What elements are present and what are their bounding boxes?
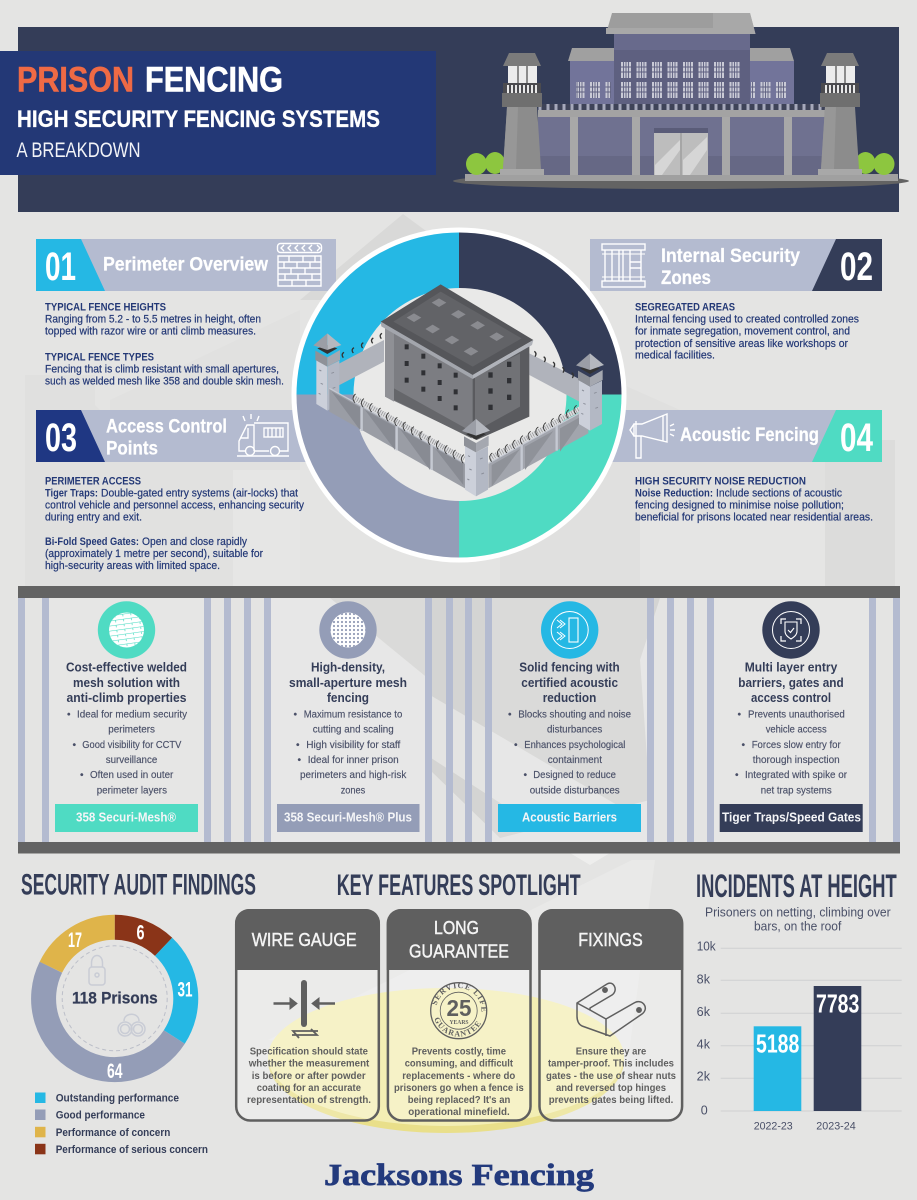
panel 03 text: Open and close rapidly bbox=[142, 536, 248, 548]
heading 01: Perimeter Overview bbox=[103, 254, 268, 276]
bullet list: outside disturbances bbox=[530, 786, 620, 797]
heading 04: Acoustic Fencing bbox=[680, 425, 819, 446]
product button: Tiger Traps/Speed Gates bbox=[722, 811, 861, 825]
number 01 tab bbox=[36, 239, 105, 291]
donut chart bbox=[44, 922, 193, 1083]
bullet list: Designed to reduce bbox=[533, 770, 616, 781]
bullet list: Forces slow entry for bbox=[752, 740, 841, 751]
card title: WIRE GAUGE bbox=[252, 929, 357, 950]
y axis labels: 4k bbox=[697, 1037, 711, 1051]
product button: 358 Securi-Mesh® Plus bbox=[284, 811, 412, 825]
bullet list: cutting and scaling bbox=[313, 725, 394, 736]
card text: and reversed top hinges bbox=[556, 1083, 666, 1094]
card text bbox=[546, 1046, 676, 1106]
title: FENCING bbox=[145, 60, 283, 100]
illustration: isometric prison bbox=[313, 284, 604, 496]
icon: acoustic barrier bbox=[541, 601, 598, 659]
panel 03 text: PERIMETER ACCESS bbox=[45, 476, 141, 488]
number 04: 04 bbox=[840, 416, 874, 460]
panel 01 text: TYPICAL FENCE HEIGHTS bbox=[45, 302, 166, 314]
central ring bbox=[292, 228, 626, 562]
heading 02: Zones bbox=[661, 268, 711, 289]
bar 2022-23 bbox=[754, 1026, 801, 1111]
icon: shield bbox=[762, 601, 820, 659]
card title: FIXINGS bbox=[578, 929, 643, 950]
bullet list: • bbox=[514, 740, 518, 751]
heading bbox=[519, 660, 620, 705]
panel 02 text: protection of sensitive areas like workshops or bbox=[635, 338, 848, 350]
card text: replacements - where do bbox=[402, 1071, 515, 1082]
heading 02 bbox=[661, 246, 800, 289]
bullet list: surveillance bbox=[106, 755, 158, 766]
card text: Ensure they are bbox=[576, 1046, 647, 1057]
icon: wire gauge bbox=[274, 983, 335, 1038]
title: PRISON bbox=[17, 60, 134, 100]
bullet list: thorough inspection bbox=[753, 755, 840, 766]
segment values: 6 bbox=[136, 922, 144, 944]
heading bbox=[289, 660, 407, 705]
panel 02 text: SEGREGATED AREAS bbox=[635, 302, 735, 314]
card text: operational minefield. bbox=[408, 1107, 510, 1118]
product button bbox=[277, 804, 420, 832]
bullet list: • bbox=[294, 709, 298, 720]
heading: certified acoustic bbox=[521, 675, 618, 690]
panel 02 band bbox=[590, 239, 882, 291]
card text: gates - the use of shear nuts bbox=[546, 1071, 676, 1082]
y axis labels: 10k bbox=[697, 940, 716, 954]
title bbox=[17, 60, 283, 100]
card text: being replaced? It's an bbox=[408, 1095, 510, 1106]
panel 03 text: Double-gated entry systems (air-locks) that bbox=[101, 488, 298, 500]
bullet list: perimeter layers bbox=[97, 786, 167, 797]
bullet list bbox=[735, 709, 848, 797]
x axis labels bbox=[754, 1120, 856, 1132]
product button: Acoustic Barriers bbox=[522, 811, 617, 825]
panel 02 text: medical facilities. bbox=[635, 350, 715, 362]
bullet list: • bbox=[72, 740, 76, 751]
legend bbox=[35, 1092, 208, 1156]
icon: padlock bbox=[89, 956, 105, 985]
y axis labels bbox=[697, 940, 716, 1118]
legend: Performance of concern bbox=[56, 1127, 171, 1139]
heading: High-density, bbox=[311, 660, 385, 674]
bullet list: zones bbox=[341, 786, 365, 797]
panel 04 text: Noise Reduction: bbox=[635, 488, 713, 500]
icon: internal gate bbox=[602, 244, 645, 287]
bullet list: vehicle access bbox=[766, 725, 827, 736]
number 02: 02 bbox=[840, 245, 873, 289]
chart subtitle bbox=[705, 905, 891, 933]
tagline: A BREAKDOWN bbox=[16, 138, 140, 162]
heading: reduction bbox=[543, 690, 596, 705]
icon: bracket bbox=[577, 983, 645, 1036]
panel 03 text bbox=[45, 476, 305, 572]
heading: key features spotlight: KEY FEATURES SPOTLIGHT bbox=[337, 869, 581, 902]
panel 04 text: Include sections of acoustic bbox=[716, 488, 843, 500]
number 03: 03 bbox=[45, 416, 77, 460]
panel 01 text bbox=[45, 302, 284, 388]
title panel bbox=[0, 51, 436, 175]
product column: Tiger Traps / Speed Gates bbox=[720, 601, 863, 832]
bullet list: perimeters and high-risk bbox=[300, 770, 407, 781]
panel 03 text: control vehicle and personnel access, enhancing security bbox=[45, 500, 305, 512]
bullet list: • bbox=[738, 709, 742, 720]
legend: Outstanding performance bbox=[56, 1093, 179, 1105]
panel 01 text: Ranging from 5.2 - to 5.5 metres in height, often bbox=[45, 314, 261, 326]
panel 01 text: topped with razor wire or anti climb measures. bbox=[45, 326, 256, 338]
icon: prison van bbox=[237, 414, 289, 456]
segment values: 64 bbox=[107, 1060, 123, 1083]
card text: is before or after powder bbox=[252, 1071, 366, 1082]
icon: 25 year badge: 25 bbox=[446, 995, 472, 1021]
bullet list: High visibility for staff bbox=[306, 740, 400, 751]
product column: Acoustic Barriers bbox=[498, 601, 641, 832]
panel 01 band bbox=[36, 239, 336, 291]
card text: prevents gates being lifted. bbox=[549, 1095, 673, 1106]
panel 01 text: TYPICAL FENCE TYPES bbox=[45, 352, 154, 364]
heading: anti-climb properties bbox=[66, 690, 186, 705]
number 04 tab bbox=[812, 410, 882, 462]
heading: small-aperture mesh bbox=[289, 675, 407, 690]
bullet list: Often used in outer bbox=[90, 770, 174, 781]
fence section frame bbox=[18, 586, 900, 854]
y axis labels: 6k bbox=[697, 1005, 711, 1019]
heading: security audit findings: SECURITY AUDIT FINDINGS bbox=[21, 868, 256, 902]
panel 01 text: such as welded mesh like 358 and double skin mesh. bbox=[45, 376, 284, 388]
panel 03 text: Bi-Fold Speed Gates: bbox=[45, 536, 139, 548]
panel 02 text: Internal fencing used to created controlled zones bbox=[635, 314, 860, 326]
icon: dense mesh bbox=[319, 601, 377, 659]
heading 03: Access Control bbox=[106, 416, 227, 438]
heading: Multi layer entry bbox=[745, 660, 838, 674]
heading: fencing bbox=[327, 690, 369, 705]
card title bbox=[409, 917, 509, 961]
bar 2023-24 bbox=[814, 986, 861, 1111]
x axis labels: 2022-23 bbox=[754, 1120, 793, 1132]
icon: megaphone bbox=[630, 414, 675, 458]
bullet list bbox=[508, 709, 631, 797]
number 01: 01 bbox=[45, 245, 76, 289]
subtitle: HIGH SECURITY FENCING SYSTEMS bbox=[17, 106, 380, 133]
y axis labels: 0 bbox=[701, 1104, 708, 1118]
panel 03 band bbox=[36, 410, 336, 462]
y axis labels: 2k bbox=[697, 1070, 711, 1084]
icon: handcuffs bbox=[118, 1014, 145, 1036]
card text bbox=[247, 1046, 371, 1106]
chart subtitle: Prisoners on netting, climbing over bbox=[705, 905, 891, 920]
card: long guarantee bbox=[386, 909, 532, 1122]
bullet list: Enhances psychological bbox=[524, 740, 625, 751]
icon: 25 year badge: YEARS bbox=[450, 1019, 469, 1026]
logo: Jacksons Fencing: Jacksons Fencing bbox=[324, 1157, 595, 1192]
panel 01 text: Fencing that is climb resistant with small apertures, bbox=[45, 364, 279, 376]
heading: barriers, gates and bbox=[738, 675, 844, 690]
panel 04 text: fencing designed to minimise noise pollution; bbox=[635, 500, 844, 512]
heading: Solid fencing with bbox=[519, 660, 620, 674]
card text: coating for an accurate bbox=[257, 1083, 361, 1094]
heading 03: Points bbox=[106, 438, 158, 460]
number 02 tab bbox=[812, 239, 882, 291]
bullet list: perimeters bbox=[108, 725, 155, 736]
heading bbox=[738, 660, 844, 705]
panel 04 text: beneficial for prisons located near residential areas. bbox=[635, 512, 873, 524]
icon: 25 year badge: GUARANTEE bbox=[435, 1018, 481, 1036]
heading: mesh solution with bbox=[73, 675, 180, 690]
bullet list: Blocks shouting and noise bbox=[518, 709, 631, 720]
product button bbox=[55, 804, 198, 832]
bullet list: • bbox=[508, 709, 512, 720]
panel 02 text bbox=[635, 302, 860, 362]
heading 03 bbox=[106, 416, 227, 460]
card text: Prevents costly, time bbox=[412, 1046, 506, 1057]
chart subtitle: bars, on the roof bbox=[754, 918, 842, 933]
card: fixings bbox=[538, 909, 683, 1120]
bullet list: • bbox=[67, 709, 71, 720]
centre label: 118 Prisons bbox=[72, 988, 158, 1008]
bullet list: • bbox=[80, 770, 84, 781]
segment values: 31 bbox=[178, 978, 193, 1002]
card text: representation of strength. bbox=[247, 1095, 371, 1106]
icon: 25 year badge: SERVICE LIFE bbox=[432, 983, 486, 1012]
icon: welded mesh bbox=[98, 601, 155, 659]
y axis labels: 8k bbox=[697, 972, 711, 986]
legend: Good performance bbox=[56, 1110, 145, 1122]
segment values: 17 bbox=[68, 929, 82, 952]
illustration: prison building bbox=[453, 13, 909, 189]
icon: 25 year badge bbox=[430, 982, 488, 1040]
bullet list: disturbances bbox=[547, 725, 602, 736]
card: wire gauge bbox=[235, 909, 380, 1120]
panel 02 text: for inmate segregation, movement control, and bbox=[635, 326, 850, 338]
card text bbox=[394, 1046, 524, 1118]
panel 03 text: Tiger Traps: bbox=[45, 488, 98, 500]
product button bbox=[720, 804, 863, 832]
spotlight beam and pool bbox=[268, 860, 655, 1133]
panel 03 text: (approximately 1 metre per second), suitable for bbox=[45, 548, 263, 560]
bullet list: • bbox=[735, 770, 739, 781]
bullet list: containment bbox=[548, 755, 602, 766]
card text: tamper-proof. This includes bbox=[548, 1058, 674, 1070]
panel 03 text: during entry and exit. bbox=[45, 512, 142, 524]
header band bbox=[18, 27, 899, 212]
icon: razor wall bbox=[278, 244, 322, 286]
panel 04 text: HIGH SECURITY NOISE REDUCTION bbox=[635, 476, 806, 488]
bullet list: Integrated with spike or bbox=[745, 770, 848, 781]
bar 2023-24: 7783 bbox=[816, 989, 859, 1019]
segment values bbox=[68, 922, 193, 1083]
bullet list: net trap systems bbox=[761, 786, 832, 797]
bullet list: • bbox=[524, 770, 528, 781]
number 03 tab bbox=[36, 410, 105, 462]
bullet list: Ideal for inner prison bbox=[308, 755, 399, 766]
panel 03 text: high-security areas with limited space. bbox=[45, 560, 220, 572]
product button: 358 Securi-Mesh® bbox=[76, 811, 177, 825]
card text: consuming, and difficult bbox=[405, 1058, 514, 1070]
bullet list: • bbox=[296, 740, 300, 751]
card title: GUARANTEE bbox=[409, 940, 509, 961]
bullet list bbox=[294, 709, 407, 797]
faint prison watermark bbox=[25, 214, 895, 865]
panel 04 band bbox=[590, 410, 882, 462]
product button bbox=[498, 804, 641, 832]
bullet list: • bbox=[742, 740, 746, 751]
heading 02: Internal Security bbox=[661, 246, 800, 267]
heading: access control bbox=[751, 690, 831, 705]
legend: Performance of serious concern bbox=[56, 1144, 208, 1156]
heading bbox=[66, 660, 187, 705]
bullet list: Maximum resistance to bbox=[304, 709, 403, 720]
bullet list: Prevents unauthorised bbox=[748, 709, 845, 720]
card text: prisoners go when a fence is bbox=[394, 1083, 524, 1094]
card text: whether the measurement bbox=[248, 1058, 370, 1070]
bullet list: • bbox=[298, 755, 302, 766]
product column: 358 Securi-Mesh Plus bbox=[277, 601, 420, 832]
heading: Cost-effective welded bbox=[66, 660, 187, 674]
bullet list: Ideal for medium security bbox=[77, 709, 188, 720]
x axis labels: 2023-24 bbox=[816, 1120, 856, 1132]
bullet list bbox=[67, 709, 188, 797]
card text: Specification should state bbox=[250, 1046, 368, 1057]
product column: 358 Securi-Mesh bbox=[55, 601, 198, 832]
bar chart bbox=[697, 940, 902, 1132]
bar 2022-23: 5188 bbox=[756, 1029, 799, 1059]
card title: LONG bbox=[434, 917, 479, 938]
bullet list: Good visibility for CCTV bbox=[82, 740, 181, 751]
panel 04 text bbox=[635, 476, 873, 524]
